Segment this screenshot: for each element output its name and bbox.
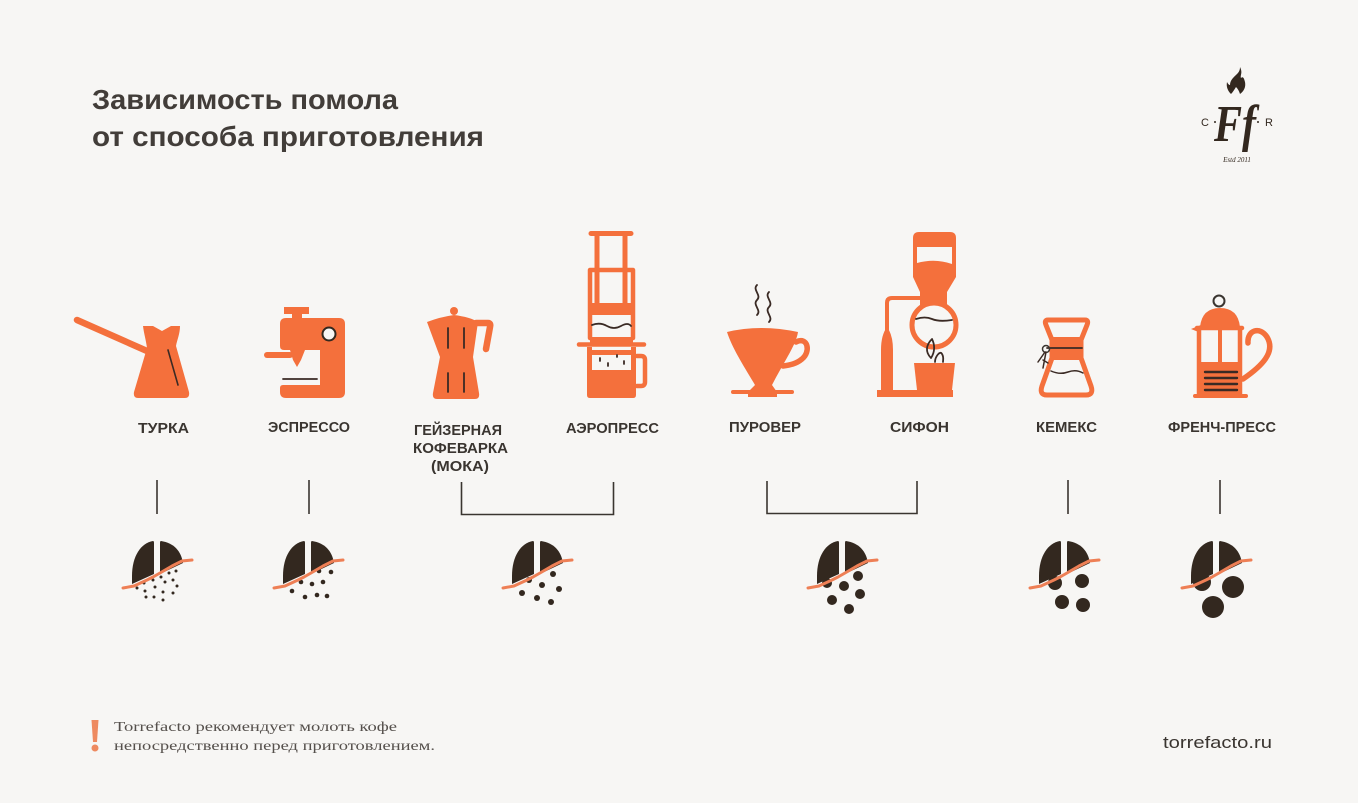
icon: siphon	[877, 232, 956, 397]
footnote: непосредственно перед приготовлением.	[114, 739, 435, 754]
labels	[138, 420, 1277, 475]
labels: ПУРОВЕР	[729, 420, 801, 436]
title: от способа приготовления	[92, 121, 484, 152]
grind: medium-fine (moka, aeropress)	[503, 541, 572, 605]
grind: medium-coarse (chemex)	[1030, 541, 1099, 612]
footnote: Torrefacto рекомендует молоть кофе	[114, 720, 397, 735]
labels: КОФЕВАРКА	[413, 441, 509, 457]
labels: АЭРОПРЕСС	[566, 421, 660, 437]
icon: french press	[1191, 296, 1270, 396]
icon: exclamation mark	[92, 720, 98, 752]
footnote	[114, 720, 435, 754]
icon: moka pot	[427, 307, 490, 399]
logo	[1201, 67, 1273, 164]
grind: fine (espresso)	[274, 541, 343, 599]
labels: СИФОН	[890, 420, 949, 436]
grind: coarse (french press)	[1182, 541, 1251, 618]
title	[92, 84, 484, 152]
icon: pourover	[727, 285, 807, 397]
logo: Estd 2011	[1222, 156, 1251, 164]
connectors	[157, 480, 1220, 514]
logo: Ff	[1213, 96, 1260, 153]
website: torrefacto.ru	[1163, 733, 1272, 752]
labels: КЕМЕКС	[1036, 420, 1098, 436]
grind: medium (pourover, siphon)	[808, 541, 877, 614]
title: Зависимость помола	[92, 84, 398, 115]
labels: ГЕЙЗЕРНАЯ	[414, 421, 502, 439]
labels: ФРЕНЧ-ПРЕСС	[1168, 420, 1277, 436]
icon: aeropress	[579, 234, 645, 398]
icon: espresso machine	[267, 307, 345, 398]
logo: R	[1265, 117, 1273, 129]
icon: turka	[77, 320, 189, 398]
logo: C	[1201, 117, 1209, 129]
labels: ТУРКА	[138, 421, 190, 437]
icon: chemex	[1038, 320, 1092, 395]
labels: ЭСПРЕССО	[268, 420, 350, 436]
grind: extra fine (turka)	[123, 541, 192, 602]
labels: (МОКА)	[431, 459, 489, 475]
icon: logo flame	[1227, 67, 1245, 94]
